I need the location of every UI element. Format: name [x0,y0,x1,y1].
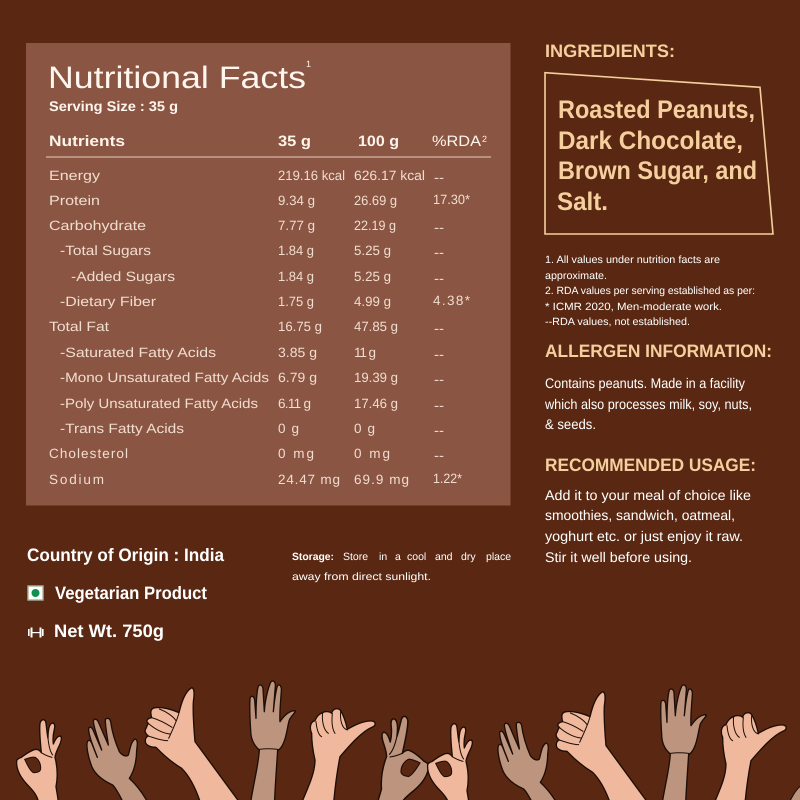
row: total fat: 47.85 g [354,319,398,334]
footnotes: --RDA values, not established. [545,316,690,328]
recommended usage text: Stir it well before using. [545,549,692,565]
row: saturated fatty acids: 11 g [354,345,376,360]
row: cholesterol [49,446,444,463]
row: protein: 26.69 g [354,193,397,208]
row: protein [49,192,471,208]
icon: weight dumbbell [28,628,44,638]
storage note: Store [343,551,368,563]
hand: second open palm [498,722,561,800]
storage note: place [486,551,511,563]
row: total fat: -- [434,321,444,336]
ingredients heading: INGREDIENTS: [545,41,675,61]
row: added sugars [71,269,444,286]
recommended usage text [545,487,751,565]
row: saturated fatty acids [60,345,444,362]
allergen text: Contains peanuts. Made in a facility [545,375,745,391]
row: carbohydrate: 22.19 g [354,218,396,233]
allergen heading: ALLERGEN INFORMATION: [545,341,772,361]
hand: second raised palm [661,685,706,800]
row: poly unsaturated fatty acids [60,396,444,413]
row: cholesterol: Cholesterol [49,446,128,461]
row: trans fatty acids: 0 g [354,421,375,436]
row: cholesterol: 0 mg [278,446,314,461]
footnotes: 2. RDA values per serving established as per: [545,285,755,297]
hand: thumbs up [145,688,243,800]
country of origin: Country of Origin : India [27,545,225,565]
table header: %RDA [432,133,481,150]
row: total sugars: 1.84 g [278,243,314,258]
table header: 100 g [358,133,399,150]
storage note: a [395,551,401,563]
storage note: in [379,551,387,563]
row: carbohydrate: Carbohydrate [49,218,146,233]
row: trans fatty acids: -Trans Fatty Acids [60,421,184,436]
allergen text [544,375,752,432]
row: dietary fiber: 4.38* [433,293,471,308]
footnotes: approximate. [545,270,607,282]
row: mono unsaturated fatty acids: 19.39 g [354,370,398,385]
row: added sugars: -Added Sugars [71,269,175,284]
row: dietary fiber [60,293,471,309]
row: carbohydrate [49,218,444,235]
footnotes: 1. All values under nutrition facts are [545,254,720,266]
footnotes [545,254,755,328]
hand: open palm [87,718,150,800]
row: energy [49,168,444,185]
storage note: away from direct sunlight. [292,571,431,583]
ingredients list: Salt. [557,188,608,216]
row: poly unsaturated fatty acids: 6.11 g [278,396,311,411]
table header: Nutrients [49,133,125,150]
row: saturated fatty acids: -- [434,347,444,362]
allergen text: which also processes milk, soy, nuts, [544,396,752,412]
row: protein: 9.34 g [278,193,315,208]
ingredients list: Roasted Peanuts, [558,96,755,124]
row: sodium: 69.9 mg [354,472,409,487]
recommended usage text: yoghurt etc. or just enjoy it raw. [545,528,743,544]
serving size: Serving Size : 35 g [49,98,178,114]
footnotes: * ICMR 2020, Men-moderate work. [545,301,722,313]
storage note [292,551,511,583]
net weight: Net Wt. 750g [54,621,164,641]
row: poly unsaturated fatty acids: -Poly Unsaturated Fatty Acids [60,396,258,411]
vegetarian product: Vegetarian Product [55,583,207,603]
storage note: and [435,551,453,563]
hand: raised palm [250,681,295,800]
panel: nutritional facts [26,43,510,506]
row: energy: Energy [49,168,100,183]
row: mono unsaturated fatty acids [60,370,444,387]
table header [49,133,487,150]
row: mono unsaturated fatty acids: -Mono Unsaturated Fatty Acids [60,370,269,385]
ingredients box [545,73,773,234]
recommended usage text: smoothies, sandwich, oatmeal, [545,507,735,523]
table header: 2 [482,134,487,144]
row: carbohydrate: 7.77 g [278,218,315,233]
title: Nutritional Facts [48,60,306,95]
row: mono unsaturated fatty acids: -- [434,372,444,387]
row: added sugars: 5.25 g [354,269,391,284]
hand: second thumb out [711,713,786,800]
illustration: raised hands [17,681,800,800]
row: sodium: 24.47 mg [278,472,340,487]
ingredients list: Dark Chocolate, [558,127,743,155]
row: energy: 626.17 kcal [354,168,425,183]
row: cholesterol: -- [434,448,444,463]
recommended usage heading: RECOMMENDED USAGE: [545,455,756,475]
row: dietary fiber: -Dietary Fiber [60,294,157,309]
row: total sugars: -- [434,245,444,260]
hand: mirrored ok sign [373,714,434,800]
storage note: dry [461,551,476,563]
table header: 35 g [278,133,311,150]
hand: ok sign [17,720,61,800]
recommended usage text: Add it to your meal of choice like [545,487,751,503]
row: carbohydrate: -- [434,220,444,235]
row: protein: Protein [49,193,100,208]
row: cholesterol: 0 mg [354,446,390,461]
hand: second thumbs up [556,692,654,800]
row: total fat [49,319,444,336]
row: dietary fiber: 4.99 g [354,294,391,309]
row: dietary fiber: 1.75 g [278,294,314,309]
row: mono unsaturated fatty acids: 6.79 g [278,370,317,385]
allergen text: & seeds. [545,416,596,432]
row: sodium: 1.22* [433,471,463,486]
row: saturated fatty acids: -Saturated Fatty Acids [60,345,216,360]
ingredients list [557,96,757,216]
row: trans fatty acids: 0 g [278,421,299,436]
row: total fat: 16.75 g [278,319,322,334]
row: total sugars: 5.25 g [354,243,391,258]
storage note: Storage: [292,551,334,563]
row: sodium: Sodium [49,472,104,487]
row: energy: -- [434,170,444,185]
icon: vegetarian mark [28,586,43,600]
hand: thumb out [300,709,375,800]
row: sodium [49,471,463,487]
row: total sugars: -Total Sugars [60,243,151,258]
row: protein: 17.30* [433,192,471,207]
row: poly unsaturated fatty acids: -- [434,398,444,413]
row: total fat: Total Fat [49,319,109,334]
row: energy: 219.16 kcal [278,168,345,183]
row: saturated fatty acids: 3.85 g [278,345,317,360]
row: added sugars: 1.84 g [278,269,314,284]
row: added sugars: -- [434,271,444,286]
hand: cropped edge [790,786,800,800]
ingredients list: Brown Sugar, and [558,157,757,185]
row: trans fatty acids: -- [434,423,444,438]
hand: second ok sign [428,724,472,800]
storage note: cool [407,551,426,563]
row: poly unsaturated fatty acids: 17.46 g [354,396,398,411]
row: trans fatty acids [60,421,444,438]
row: total sugars [60,243,444,260]
title footnote mark: 1 [306,59,311,69]
